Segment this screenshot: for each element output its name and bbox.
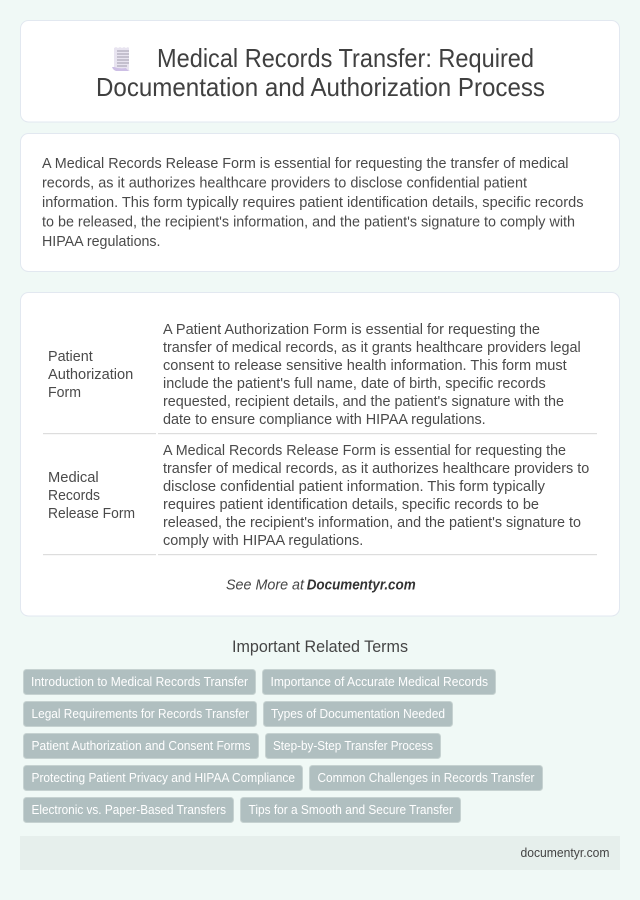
table row: Patient Authorization Form	[43, 322, 597, 434]
row description: Patient Authorization Form: A Patient Authorization Form is essential for requesting the	[163, 322, 540, 338]
row description: Medical Records Release Form: disclose confidential patient information. This form typically	[163, 479, 546, 495]
text block: summary paragraph: to be released, the recipient's information, and the patient's signature to comply with	[42, 214, 575, 230]
text block: summary paragraph: records, as it authorizes healthcare providers to disclose confidential patient	[42, 174, 528, 192]
row label: Patient Authorization Form: Form	[48, 385, 81, 401]
tag: Introduction to Medical Records Transfer: Introduction to Medical Records Transfer	[31, 674, 249, 689]
row label: Medical Records Release Form: Records	[48, 488, 100, 504]
row label: Medical Records Release Form: Medical	[48, 470, 99, 486]
row description: Patient Authorization Form: include the patient's full name, date of birth, specific records	[163, 376, 546, 392]
tag: Protecting Patient Privacy and HIPAA Compliance: Protecting Patient Privacy and HIPAA Compliance	[32, 770, 295, 785]
tag: Tips for a Smooth and Secure Transfer	[240, 798, 460, 822]
text block: summary paragraph: A Medical Records Release Form is essential for requesting the transfer of medical	[42, 155, 568, 172]
tag: Common Challenges in Records Transfer: Common Challenges in Records Transfer	[318, 770, 535, 785]
footer text: documentyr.com: documentyr.com	[520, 845, 610, 860]
text block: summary paragraph	[42, 155, 584, 250]
row description: Medical Records Release Form: A Medical Records Release Form is essential for requesting the	[163, 443, 566, 459]
tag: Tips for a Smooth and Secure Transfer: Tips for a Smooth and Secure Transfer	[248, 802, 454, 817]
row description: Medical Records Release Form: transfer of medical records, as it authorizes healthcare providers to	[163, 461, 589, 477]
tag list: related terms	[24, 670, 542, 822]
tag: Importance of Accurate Medical Records	[262, 670, 496, 694]
icon: receipt document	[112, 47, 130, 71]
row label: Patient Authorization Form	[48, 349, 133, 401]
row description: Patient Authorization Form: date to ensure compliance with HIPAA regulations.	[163, 412, 486, 428]
heading: title: Medical Records Transfer: Required	[157, 43, 534, 73]
tag: Step-by-Step Transfer Process	[266, 734, 440, 758]
link: see more	[226, 578, 416, 594]
row description: Medical Records Release Form: released, the recipient's information, and the patient's signature to	[163, 515, 581, 531]
row description: Medical Records Release Form: comply with HIPAA regulations.	[163, 533, 363, 549]
table row: Medical Records Release Form	[43, 443, 597, 555]
row description: Medical Records Release Form: requires patient identification details, specific records to be	[163, 497, 539, 513]
tag: Step-by-Step Transfer Process: Step-by-Step Transfer Process	[273, 738, 433, 753]
panel: documents table card	[20, 292, 620, 616]
text block: summary paragraph: HIPAA regulations.	[42, 233, 160, 250]
row description: Patient Authorization Form	[163, 322, 581, 428]
footer	[20, 836, 620, 870]
tag: Protecting Patient Privacy and HIPAA Compliance	[24, 766, 302, 790]
row label: Medical Records Release Form	[48, 470, 135, 522]
text block: summary paragraph: information. This form typically requires patient identification details, specific records	[42, 194, 584, 211]
tag: Patient Authorization and Consent Forms: Patient Authorization and Consent Forms	[32, 738, 250, 753]
panel: title card	[20, 20, 620, 122]
tag: Legal Requirements for Records Transfer: Legal Requirements for Records Transfer	[32, 706, 250, 721]
heading: important related terms: Important Related Terms	[232, 637, 408, 656]
tag: Introduction to Medical Records Transfer	[24, 670, 256, 694]
tag: Types of Documentation Needed: Types of Documentation Needed	[271, 706, 445, 721]
row description: Medical Records Release Form	[163, 443, 589, 549]
row description: Patient Authorization Form: requested, recipient details, and the patient's signature with the	[163, 394, 564, 410]
row label: Patient Authorization Form: Patient	[48, 349, 93, 365]
row label: Medical Records Release Form: Release Form	[48, 506, 135, 522]
tag: Legal Requirements for Records Transfer	[24, 702, 256, 726]
heading: title	[96, 43, 545, 102]
row description: Patient Authorization Form: transfer of medical records, as it grants healthcare providers legal	[163, 340, 581, 356]
tag: Electronic vs. Paper-Based Transfers	[24, 798, 234, 822]
heading: title: Documentation and Authorization Process	[96, 72, 545, 102]
tag: Types of Documentation Needed	[264, 702, 452, 726]
tag: Electronic vs. Paper-Based Transfers: Electronic vs. Paper-Based Transfers	[32, 802, 226, 817]
link: see more: Documentyr.com	[307, 578, 416, 594]
row description: Patient Authorization Form: consent to release sensitive health information. This form must	[163, 358, 567, 374]
tag: Importance of Accurate Medical Records: Importance of Accurate Medical Records	[270, 674, 488, 689]
panel: summary card	[20, 134, 620, 272]
link: see more: See More at	[226, 578, 305, 594]
tag: Common Challenges in Records Transfer	[310, 766, 542, 790]
tag: Patient Authorization and Consent Forms	[24, 734, 258, 758]
row label: Patient Authorization Form: Authorization	[48, 367, 133, 383]
